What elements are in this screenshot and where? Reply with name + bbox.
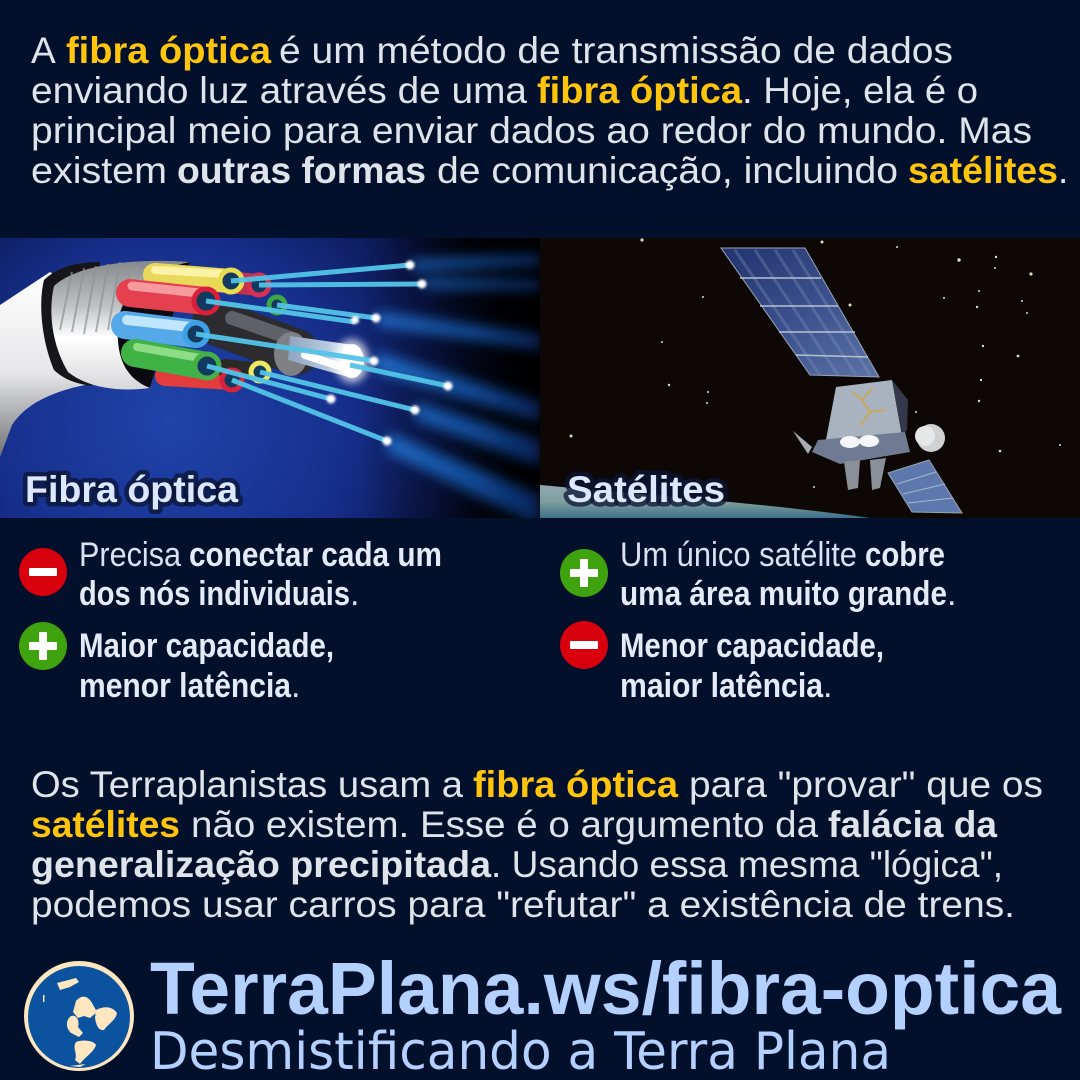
panel: fibre optic photo <box>0 238 540 526</box>
text: wide coverage: uma área muito grande <box>620 575 947 613</box>
text: needs connection: dos nós individuais <box>79 575 350 613</box>
optical fibres <box>196 265 448 441</box>
intro paragraph: de comunicação, incluindo <box>437 150 898 191</box>
cable jacket <box>0 272 90 457</box>
intro paragraph <box>31 30 1068 191</box>
intro paragraph: . <box>1058 150 1068 191</box>
text: lower capacity: . <box>823 667 832 705</box>
intro paragraph: existem <box>31 150 167 191</box>
lower solar panel <box>888 460 962 513</box>
coloured tubes <box>125 270 260 380</box>
text: wide coverage <box>620 536 956 613</box>
light streaks <box>376 254 540 526</box>
intro paragraph: fibra óptica <box>66 30 271 71</box>
panel: satellite photo <box>540 238 1080 518</box>
intro paragraph: principal meio para enviar dados ao redor do mundo. Mas <box>31 110 1032 151</box>
text: greater capacity <box>79 627 334 705</box>
intro paragraph: enviando luz através de uma <box>31 70 527 111</box>
text: greater capacity: menor latência <box>79 667 292 705</box>
closing paragraph <box>31 764 1043 925</box>
text: wide coverage: Um único satélite <box>620 536 857 574</box>
intro paragraph: é um método de transmissão de dados <box>279 30 953 71</box>
intro paragraph: satélites <box>908 150 1058 191</box>
closing paragraph: satélites <box>31 804 180 845</box>
icon: minus <box>560 621 608 669</box>
closing paragraph: para "provar" que os <box>689 764 1043 805</box>
satellite body <box>793 380 945 490</box>
stars <box>570 238 1061 488</box>
text: greater capacity: . <box>291 667 300 705</box>
earth horizon <box>540 485 870 518</box>
closing paragraph: falácia da <box>828 804 997 845</box>
intro paragraph: outras formas <box>177 150 426 191</box>
closing paragraph: podemos usar carros para "refutar" a existência de trens. <box>31 884 1015 925</box>
text: needs connection: . <box>350 575 359 613</box>
closing paragraph: fibra óptica <box>473 764 678 805</box>
label: fibra óptica: Fibra óptica <box>25 469 238 510</box>
fibre tips <box>326 260 452 446</box>
text: needs connection <box>79 536 442 613</box>
intro paragraph: A <box>31 30 56 71</box>
cable core <box>215 318 369 383</box>
footer title: url: TerraPlana.ws/fibra-optica <box>150 947 1062 1030</box>
icon: plus <box>19 622 67 670</box>
label: satélites: Satélites <box>567 469 725 510</box>
tube end rings <box>185 270 285 390</box>
icon: minus <box>19 548 67 596</box>
text: wide coverage: cobre <box>865 536 945 574</box>
text: needs connection: Precisa <box>79 536 181 574</box>
text: lower capacity: maior latência <box>620 667 824 705</box>
list: fibre optic pros and cons <box>19 536 442 705</box>
text: needs connection: conectar cada um <box>189 536 442 574</box>
text: lower capacity <box>620 627 884 705</box>
text: wide coverage: . <box>947 575 956 613</box>
closing paragraph: não existem. Esse é o argumento da <box>191 804 818 845</box>
cable armour <box>41 261 190 389</box>
intro paragraph: fibra óptica <box>537 70 742 111</box>
upper solar panel <box>721 248 879 377</box>
closing paragraph: . Usando essa mesma "lógica", <box>491 844 1003 885</box>
intro paragraph: . Hoje, ela é o <box>742 70 978 111</box>
icon: flat earth logo <box>24 961 134 1071</box>
closing paragraph: generalização precipitada <box>31 844 491 885</box>
text: lower capacity: Menor capacidade, <box>620 627 884 665</box>
list: satellite pros and cons <box>560 536 956 705</box>
icon: plus <box>560 549 608 597</box>
closing paragraph: Os Terraplanistas usam a <box>31 764 463 805</box>
text: greater capacity: Maior capacidade, <box>79 627 334 665</box>
